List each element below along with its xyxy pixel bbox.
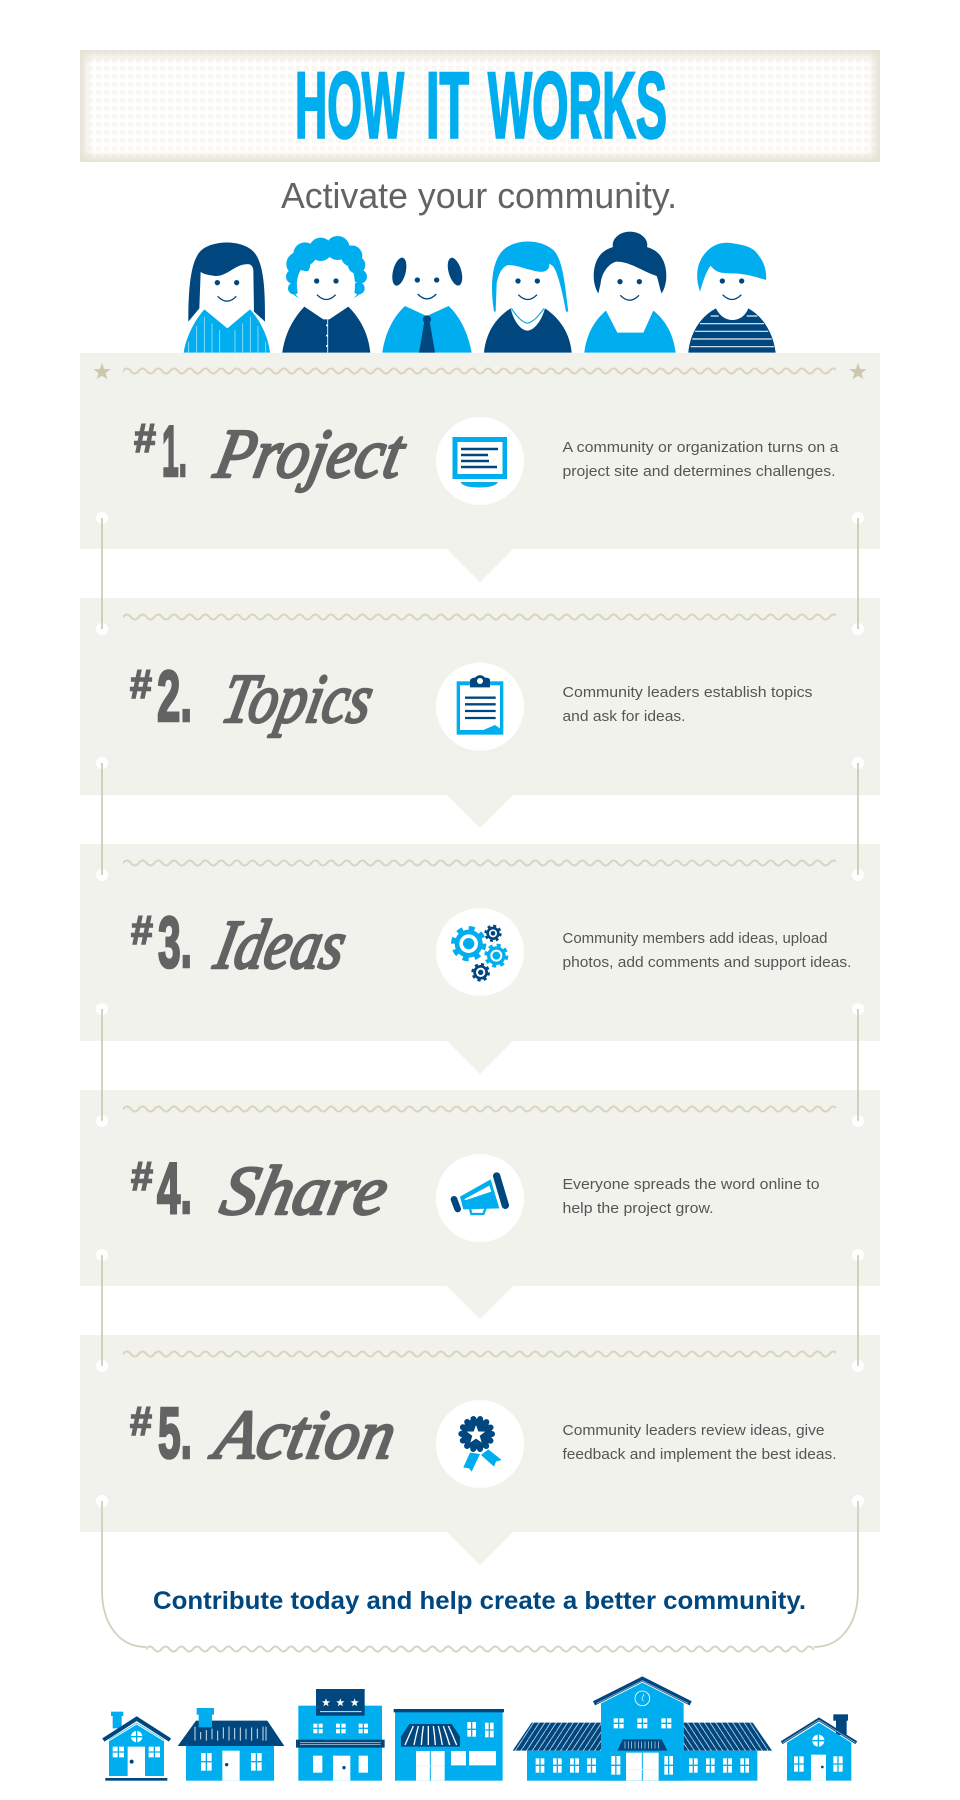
person 1 [184,242,270,353]
call to action: Contribute today and help create a better community. [153,1587,806,1615]
star right [849,363,867,379]
icon: monitor [436,417,524,505]
person 4 [484,241,572,353]
description [562,1176,820,1217]
description: photos, add comments and support ideas. [562,954,852,971]
number 4: 4. [157,1149,192,1229]
number 5: # [130,1398,152,1444]
building: shop [394,1709,504,1781]
number 5 [130,1394,192,1474]
icon: award ribbon [436,1400,524,1488]
people row [184,232,776,353]
number 4: # [131,1153,153,1199]
title: IT [426,52,469,158]
heading: Topics: Topics [216,661,380,738]
icon: clipboard [436,663,524,751]
description: Community leaders review ideas, give [562,1422,824,1439]
connector threads between panels [96,512,864,1507]
description [562,930,852,971]
description: help the project grow. [562,1200,714,1217]
number 5: 5. [158,1394,192,1474]
panel: step 1 project: 1. [162,412,187,492]
building: school [513,1679,772,1781]
description: feedback and implement the best ideas. [562,1446,836,1463]
building: house 2 [178,1708,284,1781]
description: A community or organization turns on a [562,439,839,456]
subtitle: Activate your community. [281,175,677,216]
description: and ask for ideas. [562,708,686,725]
number 2: 2. [157,657,192,737]
number 2 [130,657,192,737]
title banner [80,50,880,162]
number 4 [131,1149,192,1229]
panel: step 1 project [80,353,880,582]
number 2: # [130,661,152,707]
number 1: # [134,415,156,461]
heading: Project: Project [208,416,413,493]
building: hotel [296,1689,385,1781]
person 2 [282,236,370,353]
person 6 [688,243,776,353]
description [562,684,812,725]
building: house 1 [103,1712,170,1781]
panel: step 2 topics [80,598,880,828]
description [562,439,839,480]
town skyline [103,1679,856,1781]
heading: Ideas: Ideas [208,907,353,984]
number 3: 3. [158,903,192,983]
description: project site and determines challenges. [562,463,836,480]
panel: step 5 action [80,1335,880,1565]
number 3: # [131,907,153,953]
title banner: WORKS [488,52,667,158]
title [295,52,667,158]
description [562,1422,836,1463]
panel: step 3 ideas [80,844,880,1074]
description: Everyone spreads the word online to [562,1176,820,1193]
heading: Share: Share [215,1153,395,1230]
person 5 [584,232,676,353]
star left [93,363,111,379]
number 3 [131,903,192,983]
title: HOW [295,52,404,158]
panel: step 4 share [80,1090,880,1319]
bottom bracket with wavy edge [102,1501,858,1653]
heading: Action: Action [205,1397,403,1474]
description: Community leaders establish topics [562,684,812,701]
building: house 3 [782,1714,856,1781]
icon: gears [436,908,524,996]
person 3 [382,256,472,353]
number 1 [134,412,187,492]
icon: megaphone [436,1154,524,1242]
description: Community members add ideas, upload [562,930,828,947]
